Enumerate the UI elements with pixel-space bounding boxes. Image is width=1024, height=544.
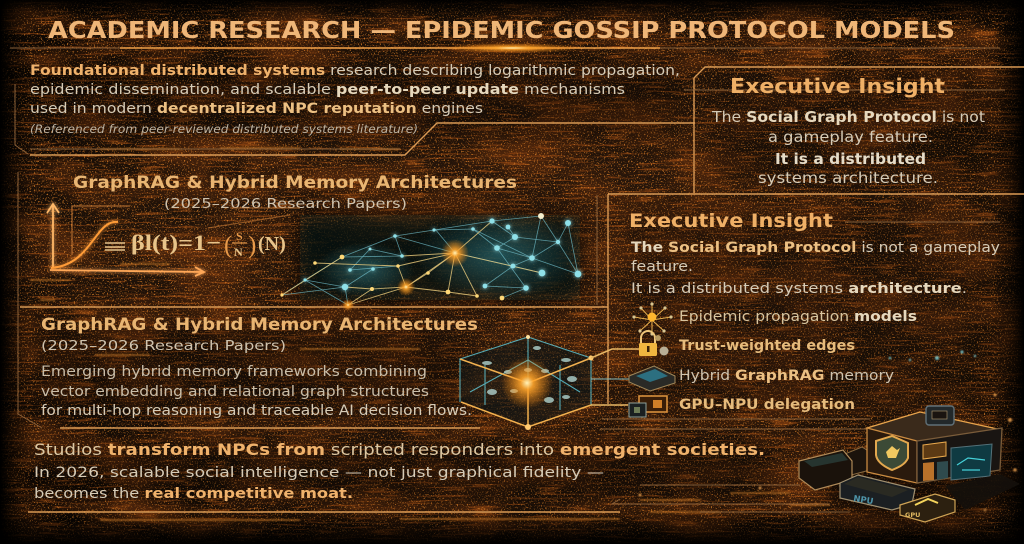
lower GraphRAG panel text: Emerging hybrid memory frameworks combining: [41, 364, 427, 380]
lower GraphRAG panel text: [41, 315, 478, 419]
chart: logistic propagation curve and equation: N: [234, 245, 243, 259]
executive insight upper panel: systems architecture.: [758, 169, 938, 187]
shield emblem: [876, 436, 908, 470]
icon: padlock: [639, 331, 668, 356]
closing statement: [34, 440, 765, 502]
chart: logistic propagation curve and equation: ): [248, 232, 256, 259]
intro text block: Foundational distributed systems research describing logarithmic propagation,: [30, 63, 680, 79]
icon: GPU and NPU chips: [629, 396, 667, 417]
GPU module: [900, 494, 955, 522]
upper GraphRAG heading: (2025–2026 Research Papers): [164, 196, 407, 212]
icon: memory chip: [629, 366, 675, 391]
closing statement: becomes the real competitive moat.: [34, 486, 353, 502]
upper GraphRAG heading: [73, 173, 517, 212]
executive insight upper panel: It is a distributed: [775, 150, 926, 168]
label: gpu-npu delegation: GPU–NPU delegation: [679, 397, 855, 413]
executive insight lower panel: It is a distributed systems architecture .: [631, 281, 967, 297]
label: hybrid graphrag memory: Hybrid GraphRAG memory: [679, 368, 894, 384]
label: epidemic propagation models: Epidemic propagation models: [679, 309, 917, 325]
intro text block: [30, 63, 680, 136]
network graph: [280, 210, 585, 311]
lower GraphRAG panel text: GraphRAG & Hybrid Memory Architectures: [41, 315, 478, 335]
label: trust-weighted edges: Trust-weighted edges: [679, 338, 855, 354]
upper GraphRAG heading: GraphRAG & Hybrid Memory Architectures: [73, 173, 517, 193]
executive insight upper panel: The Social Graph Protocol is not: [711, 108, 985, 126]
executive insight upper panel: Executive Insight: [730, 74, 945, 98]
title: ACADEMIC RESEARCH — EPIDEMIC GOSSIP PROTOCOL MODELS: [48, 18, 955, 44]
chart: logistic propagation curve and equation: βl(t)=1−: [131, 230, 221, 255]
small module: rear left: [825, 447, 870, 478]
executive insight lower panel: The Social Graph Protocol is not a gameplay: [631, 240, 1000, 256]
chart: logistic propagation curve and equation: S: [236, 229, 243, 243]
closing statement: Studios transform NPCs from scripted responders into emergent societies.: [34, 440, 765, 459]
executive insight lower panel: feature.: [631, 259, 693, 275]
closing statement: In 2026, scalable social intelligence — not just graphical fidelity —: [34, 465, 604, 481]
executive insight lower panel: Executive Insight: [629, 210, 833, 232]
NPU module: [840, 475, 915, 510]
executive insight lower panel: [629, 210, 1000, 297]
lower GraphRAG panel text: (2025–2026 Research Papers): [41, 338, 286, 354]
intro text block: used in modern decentralized NPC reputation engines: [30, 101, 483, 117]
top handle: [926, 406, 954, 425]
icon: epidemic propagation: [632, 302, 673, 336]
executive insight upper panel: [711, 74, 985, 187]
lower GraphRAG panel text: for multi-hop reasoning and traceable AI decision flows.: [41, 403, 472, 419]
lower GraphRAG panel text: vector embedding and relational graph structures: [41, 384, 429, 400]
server hardware illustration: [799, 406, 1024, 522]
main server body: [867, 406, 1002, 483]
intro text block: epidemic dissemination, and scalable peer-to-peer update mechanisms: [30, 82, 625, 98]
GPU module: GPU: [905, 511, 920, 519]
executive insight upper panel: a gameplay feature.: [768, 128, 933, 146]
chart: logistic propagation curve and equation: [47, 204, 300, 276]
title glow: [442, 43, 582, 53]
hybrid memory cube: [460, 335, 640, 430]
intro text block: (Referenced from peer-reviewed distributed systems literature): [30, 122, 418, 136]
NPU module: NPU: [853, 494, 874, 507]
chart: logistic propagation curve and equation: (N): [258, 233, 286, 255]
chart: logistic propagation curve and equation: (: [224, 232, 232, 259]
